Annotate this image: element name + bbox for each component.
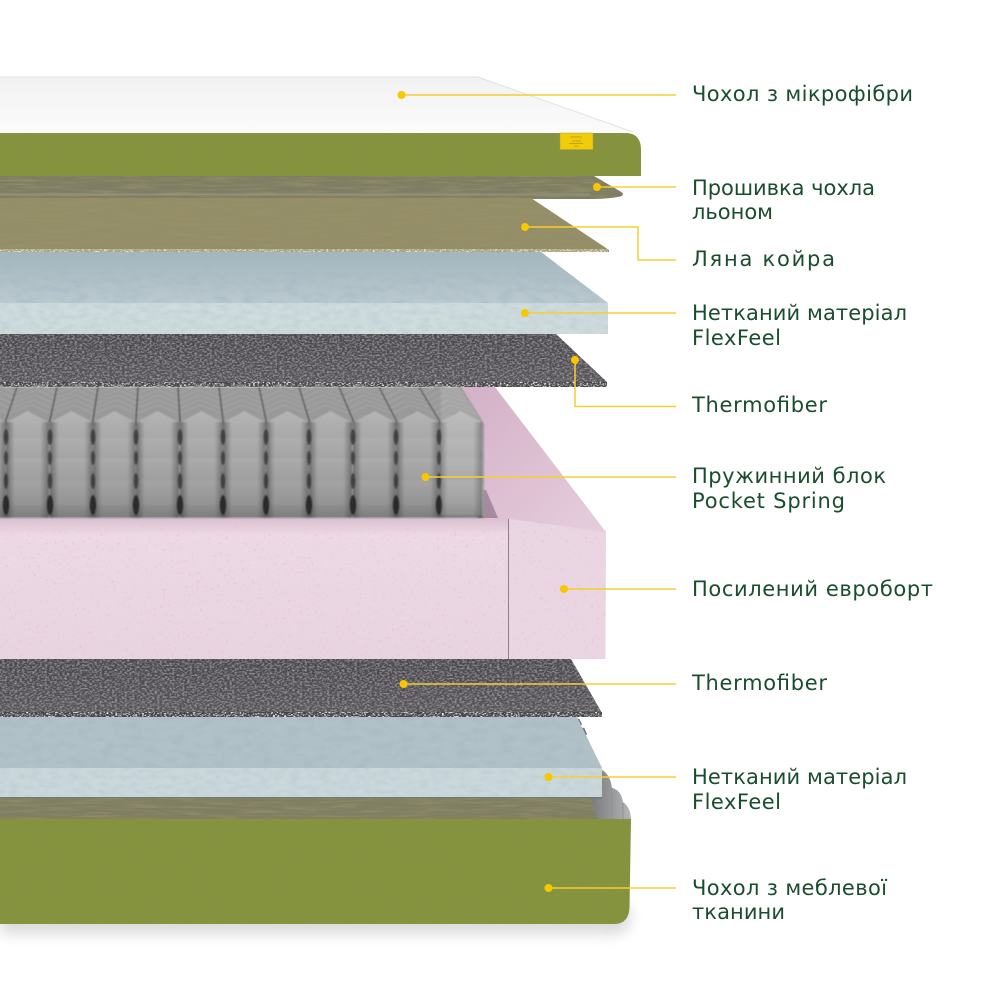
label: linen coir: Ляна койра xyxy=(692,247,835,271)
layer: reinforced euro border xyxy=(0,387,606,659)
label: pocket spring: Пружинний блок xyxy=(692,464,886,488)
label: microfiber cover: Чохол з мікрофібри xyxy=(692,82,913,106)
label: FlexFeel lower: FlexFeel xyxy=(692,790,781,814)
layer: linen strip lower xyxy=(0,798,598,819)
label: FlexFeel upper xyxy=(692,301,907,350)
layer: pocket spring block xyxy=(0,385,484,518)
layer: linen coir xyxy=(0,198,609,252)
label: pocket spring xyxy=(692,464,886,513)
pink front long face xyxy=(0,518,508,659)
callout dots xyxy=(398,91,601,892)
layer: microfiber cover top xyxy=(0,77,641,176)
label: linen stitching: Прошивка чохла xyxy=(692,176,875,200)
layer: Thermofiber lower xyxy=(0,659,602,717)
callout leader lines xyxy=(401,95,676,888)
label: linen stitching: льоном xyxy=(692,200,773,224)
shadow under bottom cover xyxy=(0,905,630,935)
layer: cover green side xyxy=(0,133,641,176)
label: FlexFeel upper: FlexFeel xyxy=(692,326,781,350)
label: furniture fabric cover: Чохол з меблевої xyxy=(692,876,887,900)
layer: bottom side springs xyxy=(578,719,631,820)
label: furniture fabric cover xyxy=(692,876,887,924)
label: Thermofiber lower: Thermofiber xyxy=(691,671,827,695)
label: linen stitching xyxy=(692,176,875,224)
pink front corner face xyxy=(509,519,606,659)
pink frame top surface xyxy=(457,387,606,534)
layer: Thermofiber upper xyxy=(0,334,607,387)
label: FlexFeel upper: Нетканий матеріал xyxy=(692,301,907,325)
label: pocket spring: Pocket Spring xyxy=(692,489,845,513)
label: FlexFeel lower: Нетканий матеріал xyxy=(692,765,907,789)
layer: furniture fabric cover xyxy=(0,819,631,924)
label: furniture fabric cover: тканини xyxy=(692,900,785,924)
layer: FlexFeel lower xyxy=(0,717,602,798)
icon: yellow tag xyxy=(560,133,593,150)
label: Thermofiber upper: Thermofiber xyxy=(691,393,827,417)
layer: FlexFeel nonwoven xyxy=(0,252,608,334)
layer: linen stitching xyxy=(0,176,623,199)
label: FlexFeel lower xyxy=(692,765,907,814)
pink inner shadow xyxy=(478,490,498,518)
label: euro border: Посилений евроборт xyxy=(692,577,933,601)
